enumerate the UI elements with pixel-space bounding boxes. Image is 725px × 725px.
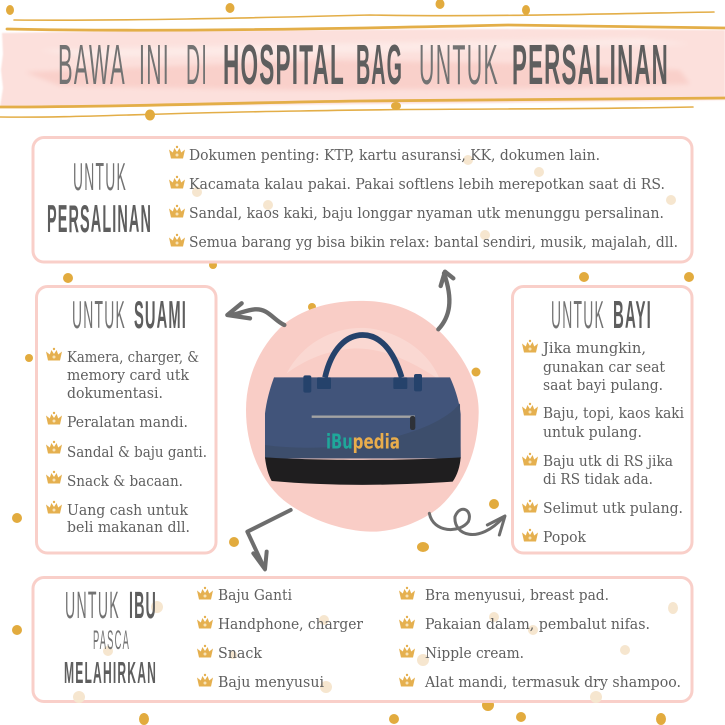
list: untuk pulang. [543, 423, 642, 441]
list: beli makanan dll. [67, 518, 190, 536]
panel: untuk suami [36, 286, 216, 553]
title [58, 33, 669, 97]
list: Semua barang yg bisa bikin relax: bantal sendiri, musik, majalah, dll. [189, 233, 678, 251]
panel: untuk ibu pasca melahirkan: IBU [129, 585, 157, 627]
list: right column: Bra menyusui, breast pad. [425, 586, 609, 604]
list: saat bayi pulang. [543, 376, 663, 394]
handle [325, 335, 402, 377]
list: Peralatan mandi. [67, 413, 188, 431]
list: left column: Baju menyusui [218, 673, 324, 691]
heading [64, 585, 157, 690]
list: Kamera, charger, & [67, 348, 199, 366]
heading [551, 294, 652, 337]
list: Kacamata kalau pakai. Pakai softlens lebih merepotkan saat di RS. [189, 175, 665, 193]
title: BAWA [58, 33, 126, 97]
title: HOSPITAL [223, 33, 345, 97]
gold lines [0, 12, 725, 117]
heading: UNTUK [551, 294, 605, 337]
faint dots [192, 155, 676, 240]
list: right column: Pakaian dalam, pembalut nifas. [425, 615, 650, 633]
list: Uang cash untuk [67, 501, 189, 519]
logo: pedia [353, 429, 400, 453]
list: Sandal & baju ganti. [67, 443, 207, 461]
body [265, 377, 461, 458]
panel: untuk suami: SUAMI [134, 294, 187, 337]
list: Jika mungkin, [541, 339, 646, 357]
title: BAG [356, 33, 403, 97]
panel: untuk bayi: BAYI [613, 294, 652, 337]
list: Sandal, kaos kaki, baju longgar nyaman utk menunggu persalinan. [189, 204, 664, 222]
title banner [0, 12, 725, 120]
heading: PASCA [93, 625, 130, 655]
list: di RS tidak ada. [543, 470, 653, 488]
arrow: to ibu [247, 510, 291, 569]
zipper [312, 413, 415, 420]
arrow: to persalinan [438, 272, 453, 329]
list: Baju, topi, kaos kaki [543, 404, 684, 422]
arrow: to bayi [429, 509, 505, 535]
straps [317, 377, 331, 389]
list: dokumentasi. [67, 384, 163, 402]
list: left column: Snack [218, 644, 263, 662]
list: Dokumen penting: KTP, kartu asuransi, KK, dokumen lain. [189, 146, 600, 164]
list: gunakan car seat [543, 358, 665, 376]
faint dots [73, 601, 678, 703]
logo [326, 429, 400, 453]
list: right column: Nipple cream. [425, 644, 524, 662]
list [169, 146, 678, 251]
list: Popok [543, 528, 587, 546]
list: Baju utk di RS jika [543, 452, 673, 470]
bag [265, 335, 461, 485]
list: right column [399, 586, 681, 691]
panel: untuk ibu pasca melahirkan [33, 578, 692, 703]
list: left column: Handphone, charger [218, 615, 364, 633]
heading: UNTUK [73, 156, 127, 199]
arrow: to suami [227, 303, 284, 325]
dots on banner [145, 102, 401, 120]
panel: untuk ibu pasca melahirkan: MELAHIRKAN [64, 655, 157, 690]
pink watercolor circle [246, 301, 479, 532]
list: right column: Alat mandi, termasuk dry shampoo. [424, 673, 681, 691]
list: left column: Baju Ganti [218, 586, 292, 604]
title: INI [139, 33, 170, 97]
list: Snack & bacaan. [67, 472, 183, 490]
list: memory card utk [67, 366, 190, 384]
list [522, 339, 684, 546]
heading: UNTUK [72, 294, 126, 337]
logo: iBu [326, 429, 353, 453]
center illustration: bag on pink circle with arrows [227, 272, 505, 569]
bottom panel [265, 457, 461, 485]
heading: UNTUK [65, 585, 120, 627]
panel: untuk persalinan [33, 138, 692, 262]
list [46, 348, 207, 536]
list: Selimut utk pulang. [543, 499, 683, 517]
heading [47, 156, 152, 241]
panel: untuk bayi [512, 286, 692, 553]
watercolor band [0, 29, 725, 107]
title: DI [186, 33, 208, 97]
panel: untuk persalinan: PERSALINAN [47, 198, 152, 241]
title: UNTUK [419, 33, 499, 97]
list: left column [197, 586, 364, 691]
